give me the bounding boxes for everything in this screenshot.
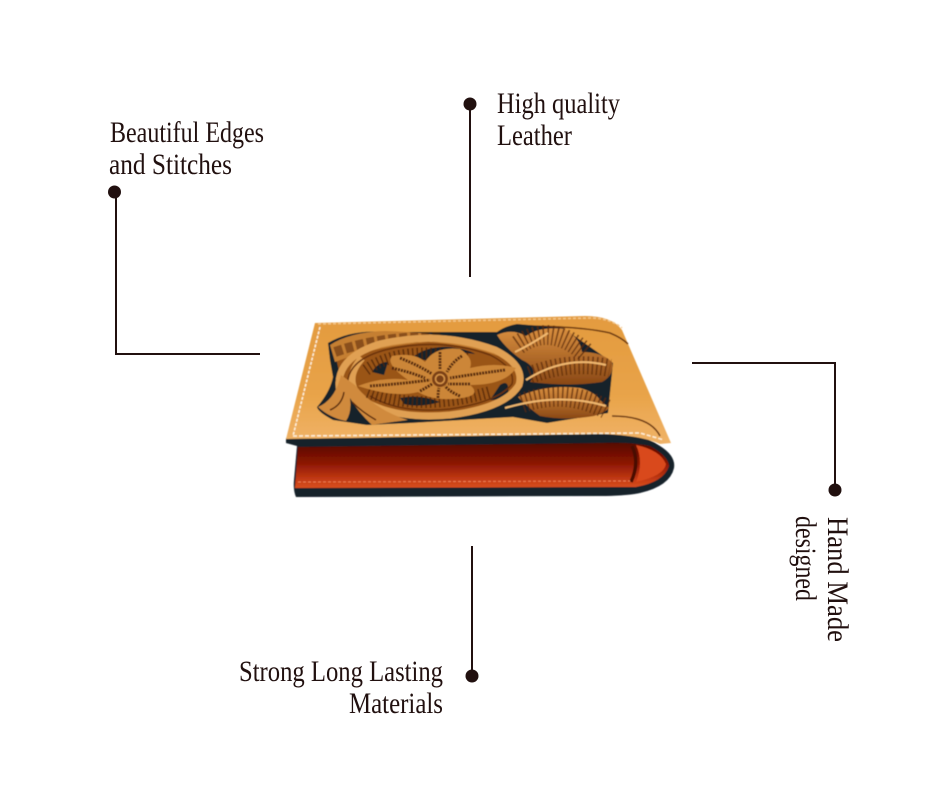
wallet: cover stitching [293,318,664,440]
leader line: right [692,363,835,490]
dot: right [828,484,842,496]
label: strong long lasting materials: Materials [349,687,443,720]
wallet: interior stitching [298,481,630,482]
carving: ring hatch [366,354,490,402]
wallet: interior fold [636,445,666,482]
label: hand made designed [789,516,854,642]
label: strong long lasting materials [239,655,443,720]
label: hand made designed: designed [789,516,822,601]
label: beautiful edges [109,116,264,181]
carving: lower right leaf [518,387,609,418]
label: high quality leather: High quality [497,87,620,120]
callout: high quality leather [464,87,620,277]
callout: beautiful edges and stitches [108,116,264,354]
carving: left scroll leaf [330,331,498,362]
label: beautiful edges: Beautiful Edges [110,116,264,149]
carving: leaf feathering [505,333,610,409]
label: hand made designed: Hand Made [821,517,854,642]
callout: strong long lasting materials [239,546,478,720]
wallet: red interior [295,443,669,488]
dot: bottom [466,670,478,682]
label: high quality leather: Leather [497,119,572,152]
carving: dark gaps inside scroll [372,347,508,406]
label: high quality leather [497,87,620,152]
wallet: dark edge and back [286,432,674,497]
dot: top [464,98,476,110]
carving: inner flower [358,349,516,399]
carving: dark background [317,324,613,425]
leader line: bottom [471,546,473,676]
carving: outer spiral scroll [339,338,520,416]
label: strong long lasting materials: Strong Long Lasting [239,655,443,688]
carving: brown underlay [335,338,522,417]
wallet illustration [286,316,674,497]
leader line: top [469,104,471,277]
label: beautiful edges: and Stitches [109,148,232,181]
leader line: left [116,192,260,354]
dot: left [108,186,121,198]
wallet: carved floral panel [317,324,613,425]
carving: upper right leaf [497,328,613,384]
callout: hand made designed [692,363,854,642]
carving: lower left scroll tails [318,375,408,425]
wallet: tan cover [286,316,671,444]
